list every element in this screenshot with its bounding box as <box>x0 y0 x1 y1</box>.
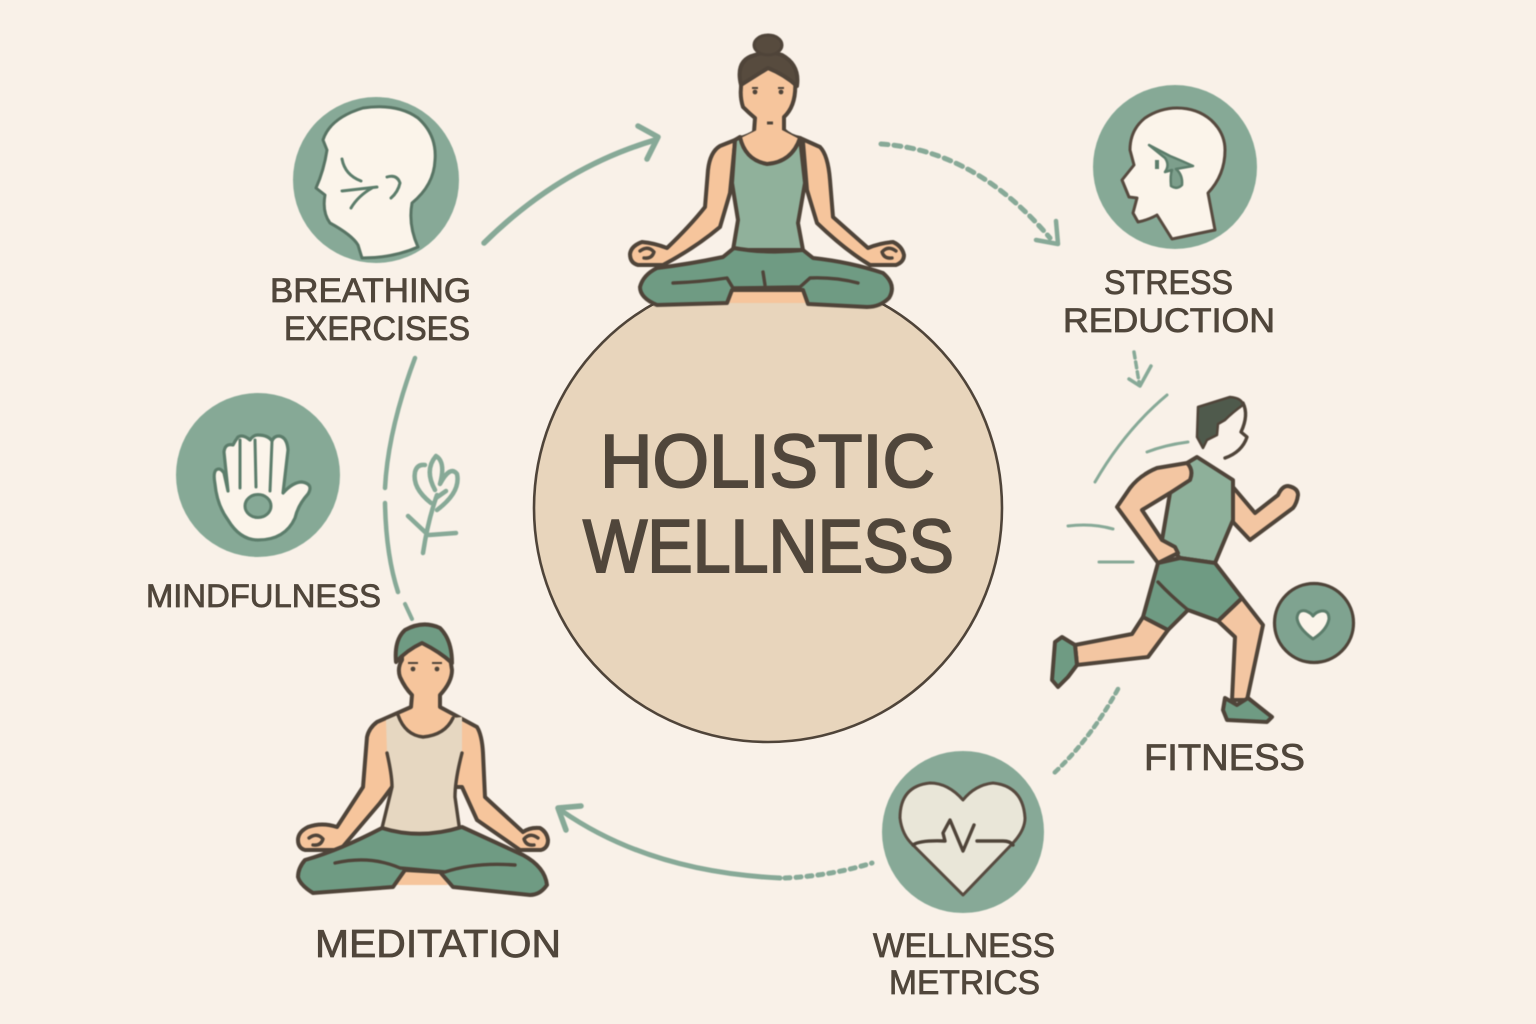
label: wellness metrics: METRICS <box>889 964 1040 1002</box>
figure: runner <box>1052 395 1298 722</box>
legs <box>727 290 808 303</box>
label: stress reduction <box>1063 264 1275 340</box>
icon: stress reduction <box>1093 85 1257 249</box>
hand details <box>640 248 896 258</box>
arrow: meditation to breathing arc <box>385 358 415 619</box>
face <box>752 87 784 89</box>
hair and bun <box>740 52 797 86</box>
back leg <box>1075 617 1168 665</box>
label: breathing exercises: EXERCISES <box>284 310 470 348</box>
label: meditation: MEDITATION <box>315 923 561 966</box>
left arm <box>1117 463 1191 563</box>
central circle <box>534 274 1002 742</box>
label: wellness metrics: WELLNESS <box>873 927 1055 965</box>
figure: seated yoga person <box>630 35 904 307</box>
arrow: metrics to meditation <box>558 806 872 878</box>
shorts <box>1143 558 1242 630</box>
icon: plant sprig <box>408 456 458 553</box>
icon: breathing exercises <box>293 97 459 263</box>
skin <box>630 62 904 265</box>
right arm <box>1233 486 1298 540</box>
title <box>583 419 954 588</box>
title: HOLISTIC <box>600 419 935 503</box>
shoes <box>1052 637 1077 687</box>
label: fitness: FITNESS <box>1144 737 1305 778</box>
label: stress reduction: REDUCTION <box>1063 302 1275 340</box>
headband <box>396 624 452 663</box>
speed lines <box>1095 395 1167 482</box>
hair <box>1197 397 1243 448</box>
face <box>408 662 442 664</box>
label: breathing exercises: BREATHING <box>270 272 471 310</box>
label: wellness metrics <box>873 927 1055 1002</box>
icon: mindfulness hand <box>176 393 340 557</box>
label: breathing exercises <box>270 272 471 348</box>
arrow: fitness to metrics <box>1052 689 1118 775</box>
figure: meditation person <box>298 624 548 895</box>
skin <box>298 636 548 850</box>
icon: small heart badge <box>1274 584 1354 662</box>
face outline <box>1225 403 1247 458</box>
tank top <box>732 137 805 250</box>
arrow: stress reduction to fitness <box>1129 352 1151 386</box>
arrow: breathing to yoga <box>484 126 658 243</box>
front leg <box>1218 598 1263 700</box>
arrow: yoga to stress reduction <box>881 144 1058 244</box>
legs <box>395 870 448 885</box>
torso <box>1162 457 1233 563</box>
title: WELLNESS <box>583 504 954 588</box>
tank top <box>382 715 462 838</box>
label: mindfulness: MINDFULNESS <box>146 578 381 614</box>
hand details <box>309 835 538 845</box>
chest skin <box>737 130 801 170</box>
icon: wellness metrics heart <box>882 751 1044 913</box>
label: stress reduction: STRESS <box>1104 264 1233 302</box>
